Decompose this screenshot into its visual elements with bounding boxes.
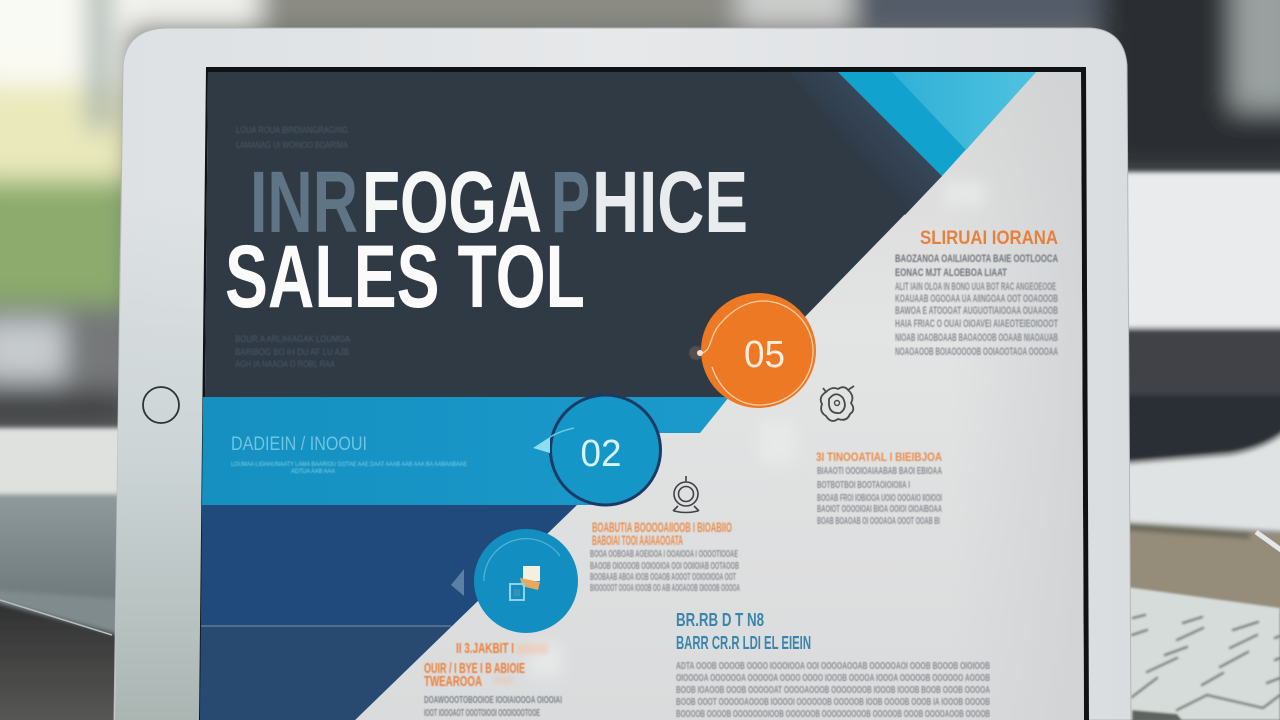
body: BOOAB FROI IOBIOOA UOIO OOOAIO IIOIOOI	[817, 492, 942, 504]
tablet screen: BIOOOOOT OOOA IOOOB OO AIB AOOAOOB OIOOOB OOOOA	[590, 582, 740, 594]
heading: BOABUTIA BOOOOAIIOOB I BIOABIIO	[592, 519, 732, 535]
home button	[143, 387, 179, 423]
white cable streak	[1256, 532, 1280, 552]
circle: 05 orange: 05	[744, 334, 785, 376]
body	[895, 253, 1058, 358]
faded orange patch	[494, 644, 548, 684]
tablet screen	[199, 67, 1089, 720]
heading: BABOIAI TOOI AAIAAOOATA	[592, 532, 683, 548]
circle: 05 orange	[701, 293, 816, 408]
screen bezel edge	[199, 67, 1089, 720]
body: BOOA OOBOAB AOEIOOA I OOAIOOA I OOOOTIOOAE	[590, 548, 738, 560]
body: BOOB IOAOOB OOOB OOOOOAT OOOOAOOOB OOOOOOOB IOOOB IOOOB BOOB OOOB OOOOA	[676, 684, 990, 696]
text block: lower right	[676, 610, 990, 720]
blue band caption	[231, 461, 468, 475]
body: NIOAB IOAOBOAAB BAOAOOOB OOAAB NIAOAUAB	[895, 332, 1058, 344]
title	[225, 154, 748, 326]
body: BAOZANOA OAILIAIOOTA BAIE OOTLOOCA	[895, 253, 1058, 265]
icon: rose gear	[821, 386, 854, 421]
pointer dot on 05 circle	[689, 346, 703, 360]
navy divider line	[201, 625, 451, 627]
body: HAIA FRIAC O OUAI OIOAVEI AIAEOTEIEOIOOOT	[895, 318, 1058, 330]
heading: OUIR / I BYE I B ABIOIE	[424, 660, 525, 677]
panel: blue band	[202, 397, 729, 505]
heading: 3I TINOOATIAL I BIEIBJOA	[816, 450, 942, 464]
body: ADTA OOOB OOOOB OOOO IOOOIOOA OOI OOOOAOOAB OOOOOAOI OOOB BOOOB OIOIOOB	[676, 660, 990, 672]
panel: navy block	[200, 505, 577, 720]
title: HICE	[592, 154, 748, 251]
blue band heading: DADIEIN / INOOUI	[231, 434, 367, 455]
icon: medal	[673, 476, 699, 512]
pointer triangle on icon circle	[451, 569, 464, 596]
frame left side shading	[115, 200, 206, 720]
blue triangle	[838, 72, 1036, 176]
keyboard at lower right	[1120, 586, 1280, 720]
heading	[592, 519, 732, 548]
body	[590, 548, 740, 594]
pointer triangle on 02 circle	[533, 428, 574, 453]
body: BOTBOTBOI BOOTAOIOIOIIA I	[817, 479, 910, 491]
faint top caption	[236, 125, 348, 150]
body: IOOT IOOOAOT OOOTOIOOI OOOIOOOTOOE	[424, 707, 540, 719]
faint top caption: LAMANAG UI WOINOO BOARIMA	[236, 140, 348, 150]
circle: 02 blue: 02	[580, 433, 622, 475]
title: INR	[250, 154, 358, 251]
title: SALES TOL	[225, 226, 585, 326]
heading: II 3.JAKBIT I	[456, 640, 514, 657]
desk edge highlight	[0, 600, 112, 635]
blue band caption: ADTUA AAB AAA	[291, 468, 336, 475]
text block: centre	[590, 519, 740, 594]
faint lower caption: AGH IA NAAOA O ROBL RAA	[235, 359, 335, 369]
faint lower caption	[235, 334, 350, 369]
body	[676, 660, 990, 720]
panel: lower navy strip	[200, 626, 451, 720]
body: BIAAOTI OOOIOAIAABAB BAOI EBIOAA	[817, 465, 942, 477]
heading: BARR CR.R LDI EL EIEIN	[676, 633, 811, 653]
body: EONAC MJT ALOEBOA LIAAT	[895, 267, 1007, 279]
heading: SLIRUAI IORANA	[920, 228, 1058, 249]
heading: TWEAROOA	[424, 673, 482, 690]
body: KOAUAAB OGOOAA UA AIINGOAA OOT OOAOOOB	[895, 293, 1058, 305]
circle: icon blue	[474, 529, 578, 633]
title: FOGA	[362, 154, 542, 251]
body: BOOB OOOT OOOOOAOOOB IOOOOI OOOOOOB OOOOOB IOOB OOOOB OOOB IA IOOOB OOOOB	[676, 696, 990, 708]
body	[817, 465, 942, 527]
right side paper shading	[950, 72, 1084, 720]
body	[424, 694, 562, 719]
faint top caption: LOUA ROUA BIRDIANGRAGING	[236, 125, 348, 135]
title: P	[551, 154, 590, 251]
text block: lower left	[424, 640, 562, 719]
circle: 02 blue	[550, 395, 660, 505]
body: OIOOOOA OOOOOOA OOOOOA OOOO OOOO IOOOB OOOOA IOOOA OOOOOB OOOOOO AOOOB	[676, 672, 990, 684]
body: BOOBAAB ABOA IOOB OOAOB AOOOT OOIOOIOOA OOT	[590, 571, 736, 583]
body: BOOOOB OOOOB OOOOOOOIOOB OOOOOOB OOOOOOOOOB OOOOOB OOOB OOOOAOOB OOOOB	[676, 708, 990, 720]
body: BAWOA E ATOOOAT AUGUOTIAIOOAA OUAAOOB	[895, 305, 1058, 317]
blue band caption: LOUMAA LIGHAUNAATY LAMA BAARIOU GOTAE AAE DAAT AAAB AAB AAA BA AABAABAAE	[231, 461, 468, 468]
paper background	[202, 72, 1084, 720]
body: BOAB BOAOAB OI OOOAOA OOOT OOAB BI	[817, 515, 940, 527]
heading	[424, 640, 525, 690]
body: BAOOB OIOOOOB OOIOOIOA OOI OOIIOIAB OOTAOOB	[590, 560, 739, 572]
text block: middle right	[816, 450, 942, 527]
heading: BR.RB D T N8	[676, 610, 764, 630]
body: DOAWOOOTOBOOIOE IOOIAIOOOA OIOOIAI	[424, 694, 562, 706]
faint light patches	[528, 182, 985, 678]
faint lower caption: BOUR.A ARLIHIAGAK LOUMGA	[235, 334, 350, 344]
body: BAOIOT OOOOIOAI BIOA OOIOI OIOAIBOAA	[817, 503, 942, 515]
body: ALIT IAIN OLOA IN BONO UUA BOT RAC ANGEOEOOE	[895, 281, 1056, 293]
text block: upper right	[895, 228, 1058, 358]
faint lower caption: BARIBOG BO IH DU AF LU AJB	[235, 347, 349, 357]
body: NOAOAOOB BOIAOOOOOB OOIAOOTAOA OOOOAA	[895, 346, 1058, 358]
tablet frame	[114, 28, 1131, 720]
shadow stripe beside triangle	[790, 72, 942, 215]
panel: dark title area	[205, 72, 942, 397]
heading	[676, 610, 811, 653]
icon: document and box	[510, 566, 540, 600]
